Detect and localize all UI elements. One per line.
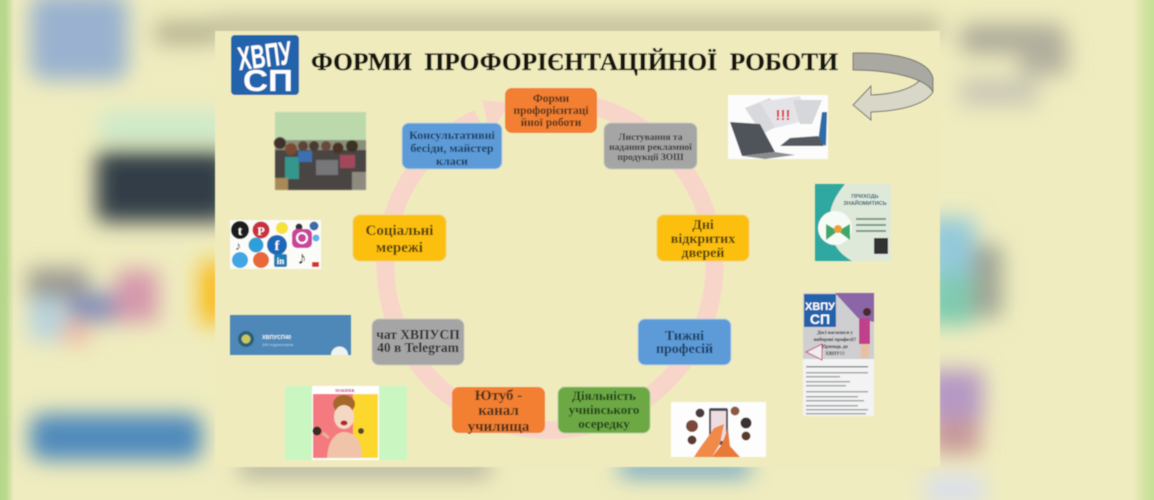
poster: choose a profession: Досі вагаєшся у — [817, 331, 853, 336]
box: Консультативні бесіди: Консультативні — [409, 128, 496, 142]
icons: social networks: in — [277, 256, 284, 266]
box: чат в Telegram: чат ХВПУСП — [376, 327, 460, 342]
box: Діяльність учнівського осередку — [558, 387, 650, 433]
poster: choose a profession: СП — [810, 311, 830, 327]
box: Листування: надання рекламної — [609, 143, 692, 153]
screenshot: Telegram channel: 349 подписчиков — [262, 342, 293, 347]
box: Консультативні бесіди: бесіди, майстер — [410, 141, 494, 155]
box: Соціальні мережі — [353, 215, 446, 261]
picture: makeup illustration — [285, 386, 407, 460]
logo — [231, 34, 299, 98]
photo: group of students — [274, 112, 366, 190]
box: Дні відкритих дверей: Дні — [692, 218, 714, 233]
box: Форми профорієнтаційної роботи — [505, 88, 597, 133]
box: Ютуб-канал училища: училища — [468, 419, 530, 435]
curved grey arrow — [853, 53, 933, 120]
cycle ring arrow — [385, 100, 715, 430]
box: Соціальні мережі: Соціальні — [366, 223, 433, 239]
icons: social networks: ♪ — [235, 239, 241, 253]
box: Консультативні бесіди: класи — [436, 154, 468, 168]
poster: choose a profession: ХВПУ — [805, 301, 835, 313]
poster: open doors day — [815, 184, 891, 261]
box: Соціальні мережі: мережі — [376, 240, 423, 256]
box: Форми профорієнтаційної роботи: Форми — [533, 93, 570, 105]
box: чат в Telegram: 40 в Telegram — [377, 340, 460, 355]
poster: open doors day: ПРИХОДЬ — [851, 194, 879, 200]
icons: social networks: P — [257, 224, 265, 238]
box: Форми профорієнтаційної роботи: йної роботи — [521, 117, 582, 129]
poster: choose a profession — [803, 293, 874, 416]
box: Тижні професій: Тижні — [665, 329, 704, 344]
box: Ютуб-канал училища — [452, 387, 545, 435]
box: Листування — [604, 123, 697, 169]
box: Тижні професій — [638, 319, 731, 365]
box: Діяльність учнівського осередку: Діяльність — [572, 388, 636, 403]
title: ФОРМИ ПРОФОРІЄНТАЦІЙНОЇ РОБОТИ — [311, 47, 838, 76]
box: Тижні професій: професій — [656, 342, 713, 357]
box: Ютуб-канал училища: Ютуб - — [475, 388, 522, 404]
box: Форми профорієнтаційної роботи: профорієнтаці — [513, 105, 589, 117]
box: Діяльність учнівського осередку: осередку — [578, 416, 630, 431]
main panel — [215, 31, 940, 467]
box: Листування: Листування та — [619, 133, 683, 143]
icons: social networks: t — [238, 223, 243, 238]
picture: two laptops exchanging documents: !!! — [776, 107, 790, 124]
box: Ютуб-канал училища: канал — [478, 403, 519, 419]
box: Дні відкритих дверей — [657, 215, 749, 261]
picture: hands holding a phone with contacts — [671, 402, 766, 457]
box: Листування: продукції ЗОШ — [617, 152, 684, 163]
poster: choose a profession: виборові професії? — [814, 338, 857, 343]
picture: two laptops exchanging documents — [728, 95, 828, 159]
icons: social networks: ♪ — [298, 248, 306, 268]
poster: choose a profession: ХВПУ!!! — [825, 352, 845, 357]
screenshot: Telegram channel: ХВПУСП40 — [262, 335, 291, 341]
poster: choose a profession: Приходь до — [822, 345, 848, 350]
logo: ХВПУ — [236, 34, 294, 77]
box: Діяльність учнівського осередку: учнівського — [569, 402, 639, 417]
box: Дні відкритих дверей: відкритих — [671, 232, 735, 247]
icons: social networks — [230, 220, 321, 269]
icons: social networks: f — [275, 239, 280, 254]
poster: open doors day: ЗНАЙОМИТИСЬ — [843, 199, 887, 207]
screenshot: Telegram channel — [230, 315, 351, 355]
picture: makeup illustration: МАКИЯЖ — [335, 388, 355, 393]
logo: СП — [243, 63, 293, 98]
box: Дні відкритих дверей: дверей — [682, 246, 724, 261]
box: Консультативні бесіди — [402, 123, 502, 169]
box: чат в Telegram — [372, 319, 464, 365]
